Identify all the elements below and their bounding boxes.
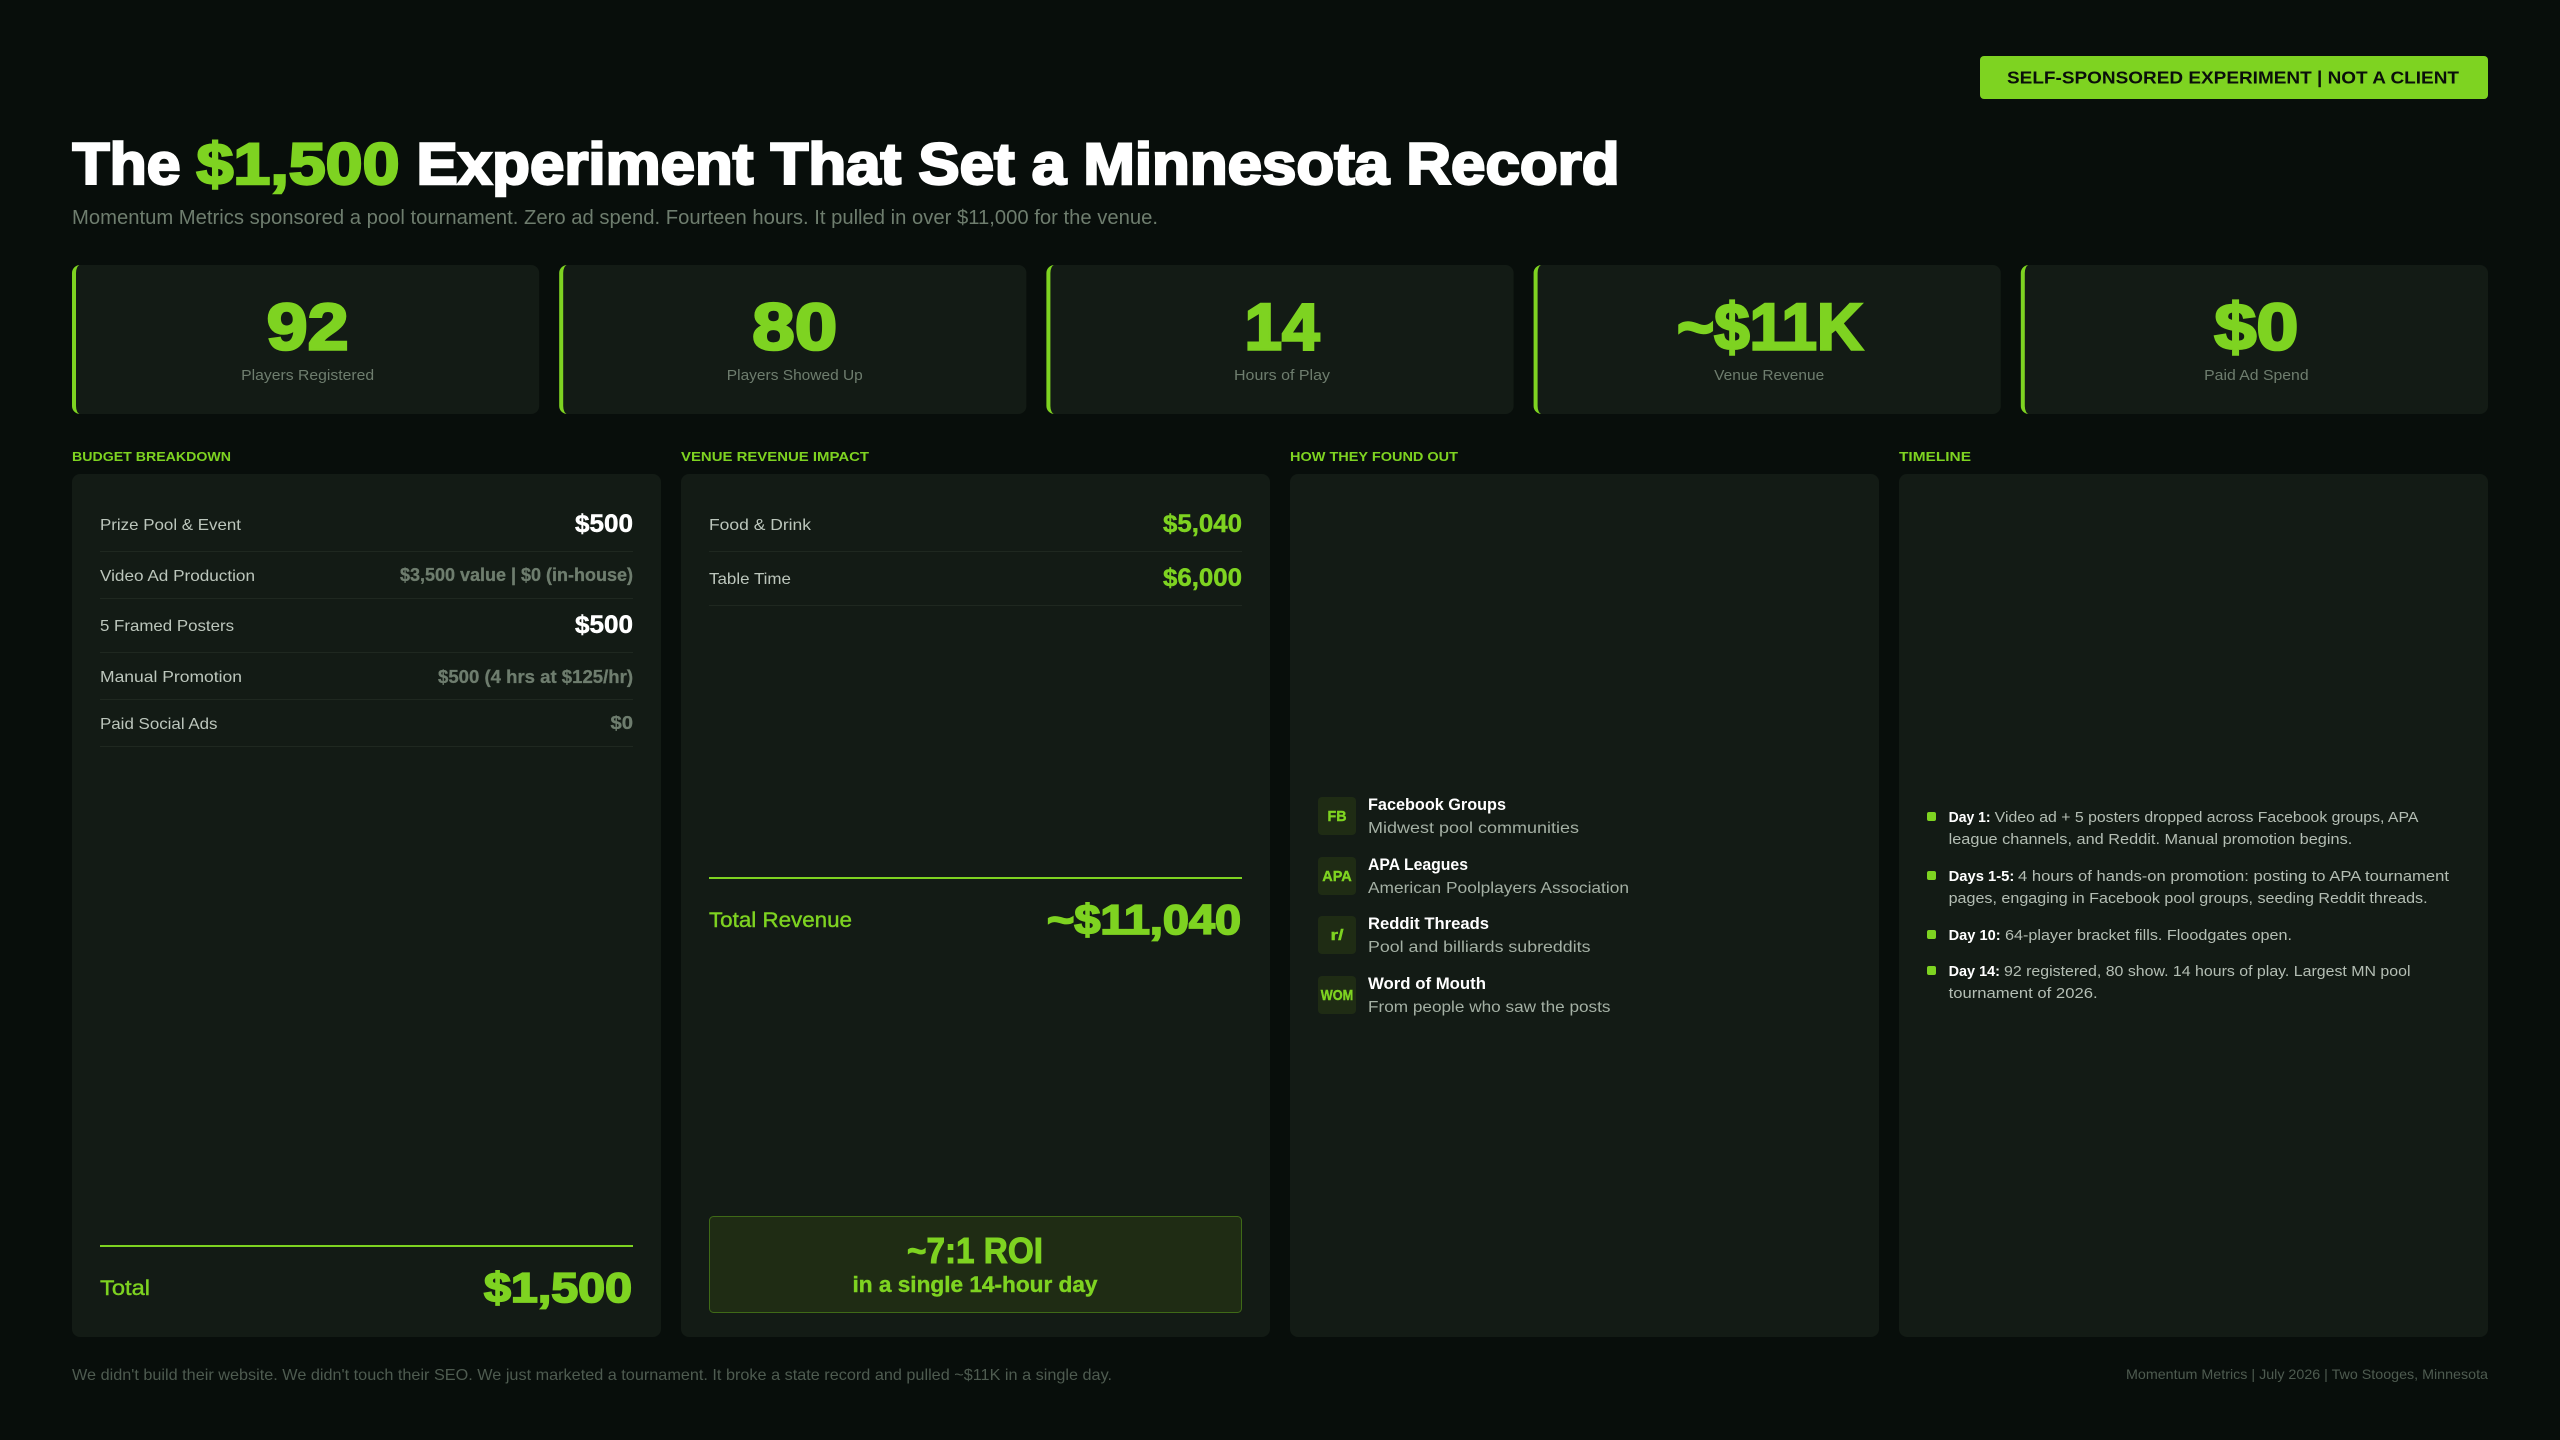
channel: APA leagues: APA — [1322, 868, 1352, 885]
row: table time: Table Time — [709, 571, 791, 588]
row: table time: $6,000 — [1163, 564, 1242, 592]
channel: word of mouth: From people who saw the posts — [1368, 999, 1610, 1016]
timeline item: day 14: 92 registered, 80 show. 14 hours of play. Largest MN pool — [2004, 963, 2410, 980]
footer credit: Momentum Metrics | July 2026 | Two Stooges, Minnesota — [2126, 1366, 2488, 1382]
total row: $1,500 — [484, 1264, 632, 1311]
timeline item: day 14: Day 14: — [1949, 963, 2000, 980]
timeline item: day 1: league channels, and Reddit. Manual promotion begins. — [1949, 831, 2352, 848]
channel: word of mouth — [1318, 974, 1610, 1016]
stat card: players showed up: 80 — [752, 290, 837, 364]
row: manual promotion: $500 (4 hrs at $125/hr) — [438, 667, 633, 687]
stat card: hours of play — [1046, 265, 1514, 414]
channel: Reddit threads: r/ — [1330, 927, 1345, 944]
total revenue row: Total Revenue — [709, 909, 852, 932]
panel: timeline — [1899, 474, 2488, 1337]
heading: timeline: TIMELINE — [1899, 449, 1971, 464]
title: Experiment That Set a Minnesota Record — [416, 132, 1620, 197]
stat card: venue revenue — [1534, 265, 2001, 414]
panel: how they found out — [1290, 474, 1879, 1337]
stat card: venue revenue: Venue Revenue — [1714, 367, 1824, 384]
row: food and drink: Food & Drink — [709, 517, 812, 534]
row: food and drink — [709, 510, 1242, 552]
heading: how they found out: HOW THEY FOUND OUT — [1290, 449, 1458, 464]
footer note: We didn't build their website. We didn't touch their SEO. We just marketed a tournament. It broke a state record and pulled ~$11K in a single day. — [72, 1367, 1112, 1384]
stat card: paid ad spend: Paid Ad Spend — [2204, 367, 2309, 384]
channel: word of mouth: WOM — [1321, 987, 1353, 1004]
channel: Facebook groups: FB — [1328, 808, 1347, 825]
channel: Reddit threads: Pool and billiards subreddits — [1368, 939, 1590, 956]
stat card: players showed up — [559, 265, 1026, 414]
stat card: players registered — [72, 265, 539, 414]
row: paid social ads: Paid Social Ads — [100, 716, 218, 733]
row: video ad production: $3,500 value | $0 (in-house) — [400, 565, 633, 585]
callout: ROI: ~7:1 ROI — [907, 1230, 1043, 1271]
row: manual promotion: Manual Promotion — [100, 669, 242, 686]
stat card: hours of play: 14 — [1244, 290, 1320, 364]
badge: SELF-SPONSORED EXPERIMENT | NOT A CLIENT — [2007, 68, 2459, 88]
timeline item: day 10: Day 10: — [1949, 927, 2001, 944]
row: manual promotion — [100, 667, 633, 700]
row: framed posters: 5 Framed Posters — [100, 618, 234, 635]
total row — [100, 1245, 633, 1311]
subtitle: Momentum Metrics sponsored a pool tournament. Zero ad spend. Fourteen hours. It pulled in over $11,000 for the venue. — [72, 207, 1158, 229]
callout: ROI — [710, 1216, 1242, 1312]
channel: APA leagues — [1318, 855, 1629, 897]
panel: venue revenue impact — [681, 474, 1270, 1337]
timeline item: days 1-5: Days 1-5: — [1949, 868, 2014, 885]
row: prize pool — [100, 510, 633, 552]
total row: Total — [100, 1277, 150, 1300]
title: The — [72, 132, 180, 197]
row: table time — [709, 564, 1242, 606]
channel: Reddit threads: Reddit Threads — [1368, 914, 1489, 933]
title: $1,500 — [196, 132, 400, 197]
stat card: paid ad spend: $0 — [2214, 290, 2298, 364]
row: framed posters — [100, 611, 633, 653]
row: prize pool: $500 — [575, 510, 633, 538]
timeline item: days 1-5: pages, engaging in Facebook pool groups, seeding Reddit threads. — [1949, 890, 2428, 907]
row: prize pool: Prize Pool & Event — [100, 517, 242, 534]
channel: Facebook groups — [1318, 795, 1579, 837]
timeline item: days 1-5 — [1927, 868, 2450, 907]
channel: Facebook groups: Facebook Groups — [1368, 795, 1506, 814]
timeline item: day 10: 64-player bracket fills. Floodgates open. — [2005, 927, 2292, 944]
stat card: paid ad spend — [2021, 265, 2488, 414]
stat card: players registered: Players Registered — [241, 367, 374, 384]
channel: APA leagues: APA Leagues — [1368, 855, 1468, 874]
timeline item: day 14 — [1927, 963, 2410, 1002]
row: food and drink: $5,040 — [1163, 510, 1242, 538]
total revenue row: ~$11,040 — [1047, 896, 1241, 943]
timeline item: day 14: tournament of 2026. — [1949, 985, 2098, 1002]
heading: budget breakdown: BUDGET BREAKDOWN — [72, 449, 231, 464]
stat card: players registered: 92 — [267, 290, 349, 364]
badge — [1980, 56, 2488, 99]
timeline item: day 1: Day 1: — [1949, 809, 1991, 826]
row: framed posters: $500 — [575, 611, 633, 639]
row: video ad production: Video Ad Production — [100, 568, 255, 585]
channel: word of mouth: Word of Mouth — [1368, 974, 1486, 993]
stat card: hours of play: Hours of Play — [1234, 367, 1331, 384]
channel: Reddit threads — [1318, 914, 1590, 956]
row: paid social ads — [100, 713, 633, 747]
row: video ad production — [100, 565, 633, 599]
timeline item: days 1-5: 4 hours of hands-on promotion: posting to APA tournament — [2018, 868, 2450, 885]
panel: budget breakdown — [72, 474, 661, 1337]
stat card: players showed up: Players Showed Up — [727, 367, 863, 384]
row: paid social ads: $0 — [610, 713, 633, 733]
callout: ROI: in a single 14-hour day — [852, 1272, 1098, 1297]
channel: Facebook groups: Midwest pool communities — [1368, 820, 1579, 837]
stat card: venue revenue: ~$11K — [1677, 290, 1863, 364]
channel: APA leagues: American Poolplayers Association — [1368, 880, 1629, 897]
timeline item: day 1 — [1927, 809, 2418, 848]
timeline item: day 1: Video ad + 5 posters dropped across Facebook groups, APA — [1995, 809, 2418, 826]
heading: venue revenue impact: VENUE REVENUE IMPACT — [681, 449, 869, 464]
total revenue row — [709, 877, 1242, 943]
